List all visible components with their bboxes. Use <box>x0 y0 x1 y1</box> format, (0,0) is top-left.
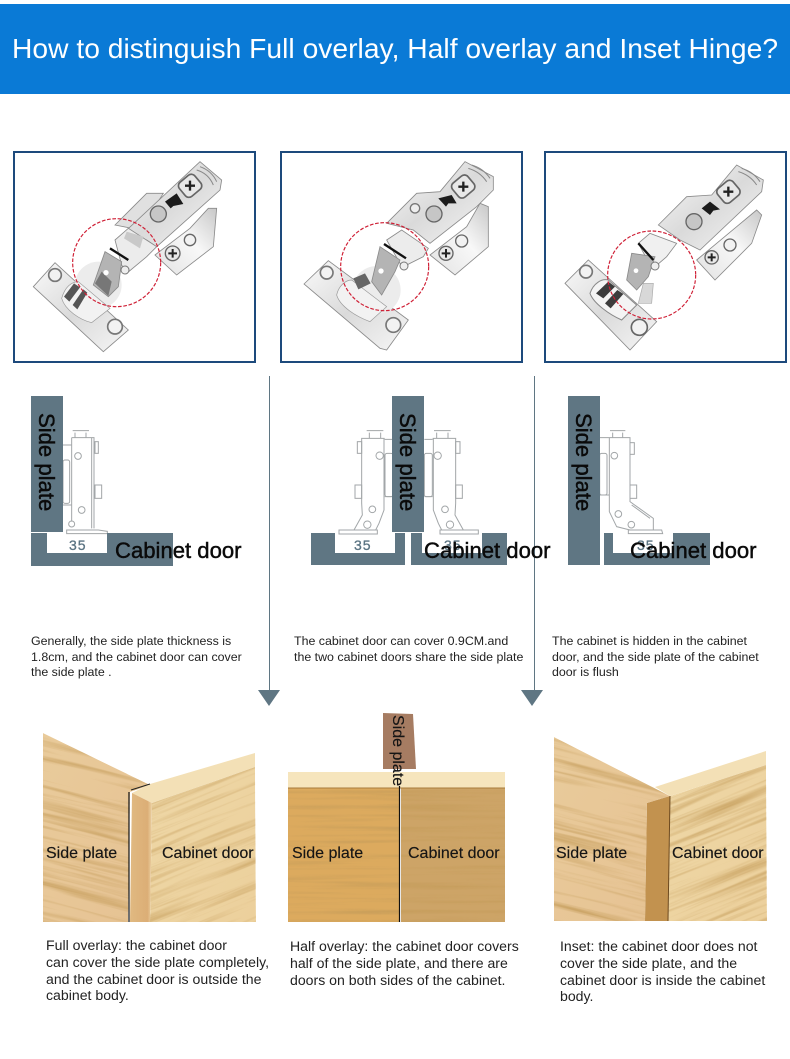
caption: half overlay <box>290 938 519 988</box>
wood sample: half overlay: Cabinet door <box>408 845 500 862</box>
panel: inset hinge photo <box>545 152 786 362</box>
text block: half overlay note: the two cabinet doors share the side plate <box>294 650 523 664</box>
diagram: inset: 35 <box>637 537 655 553</box>
caption: half overlay: half of the side plate, and there are <box>290 955 508 971</box>
title banner <box>0 4 790 94</box>
wood sample: half overlay <box>288 713 505 922</box>
panel: full overlay hinge photo <box>14 152 255 362</box>
diagram: full overlay: 35 <box>69 537 87 553</box>
diagram: full overlay <box>31 396 242 566</box>
caption: inset: cover the side plate, and the <box>560 955 737 971</box>
text block: full overlay note: 1.8cm, and the cabinet door can cover <box>31 650 242 664</box>
caption: full overlay: can cover the side plate completely, <box>46 954 269 970</box>
caption: full overlay <box>46 937 269 1003</box>
diagram: inset: Cabinet door <box>630 538 757 563</box>
text block: half overlay note: The cabinet door can cover 0.9CM.and <box>294 634 508 648</box>
diagram: half overlay: Side plate <box>395 413 420 511</box>
wood sample: full overlay: Side plate <box>46 845 117 862</box>
wood sample: full overlay <box>43 733 256 922</box>
caption: inset: body. <box>560 988 593 1004</box>
diagram: half overlay: 35 <box>444 537 462 553</box>
caption: full overlay: and the cabinet door is outside the <box>46 971 262 987</box>
diagram: half overlay: Cabinet door <box>424 538 551 563</box>
wood sample: inset <box>554 737 767 921</box>
caption: full overlay: cabinet body. <box>46 987 129 1003</box>
wood sample: half overlay: Side plate <box>292 845 363 862</box>
caption: inset <box>560 938 765 1004</box>
diagram: full overlay: Cabinet door <box>115 538 242 563</box>
diagram: inset <box>568 396 757 565</box>
diagram: half overlay <box>311 396 551 565</box>
text block: full overlay note: the side plate . <box>31 665 112 679</box>
caption: inset: Inset: the cabinet door does not <box>560 938 758 954</box>
caption: inset: cabinet door is inside the cabinet <box>560 972 765 988</box>
text block: inset note: The cabinet is hidden in the cabinet <box>552 634 747 648</box>
diagram: half overlay: 35 <box>354 537 372 553</box>
title banner: How to distinguish Full overlay, Half overlay and Inset Hinge? <box>12 32 778 64</box>
text block: inset note <box>552 634 759 679</box>
panel: half overlay hinge photo <box>281 152 522 362</box>
wood sample: full overlay: Cabinet door <box>162 845 254 862</box>
caption: full overlay: Full overlay: the cabinet door <box>46 937 227 953</box>
caption: half overlay: Half overlay: the cabinet door covers <box>290 938 519 954</box>
text block: half overlay note <box>294 634 523 664</box>
arrow: right column divider <box>521 376 543 706</box>
diagram: full overlay: Side plate <box>34 413 59 511</box>
text block: full overlay note <box>31 634 242 679</box>
wood sample: half overlay: Side plate <box>389 715 406 786</box>
wood sample: inset: Side plate <box>556 845 627 862</box>
arrow: left column divider <box>258 376 280 706</box>
caption: half overlay: doors on both sides of the cabinet. <box>290 972 505 988</box>
text block: inset note: door, and the side plate of the cabinet <box>552 650 759 664</box>
text block: full overlay note: Generally, the side plate thickness is <box>31 634 231 648</box>
text block: inset note: door is flush <box>552 665 619 679</box>
diagram: inset: Side plate <box>571 413 596 511</box>
wood sample: inset: Cabinet door <box>672 845 764 862</box>
